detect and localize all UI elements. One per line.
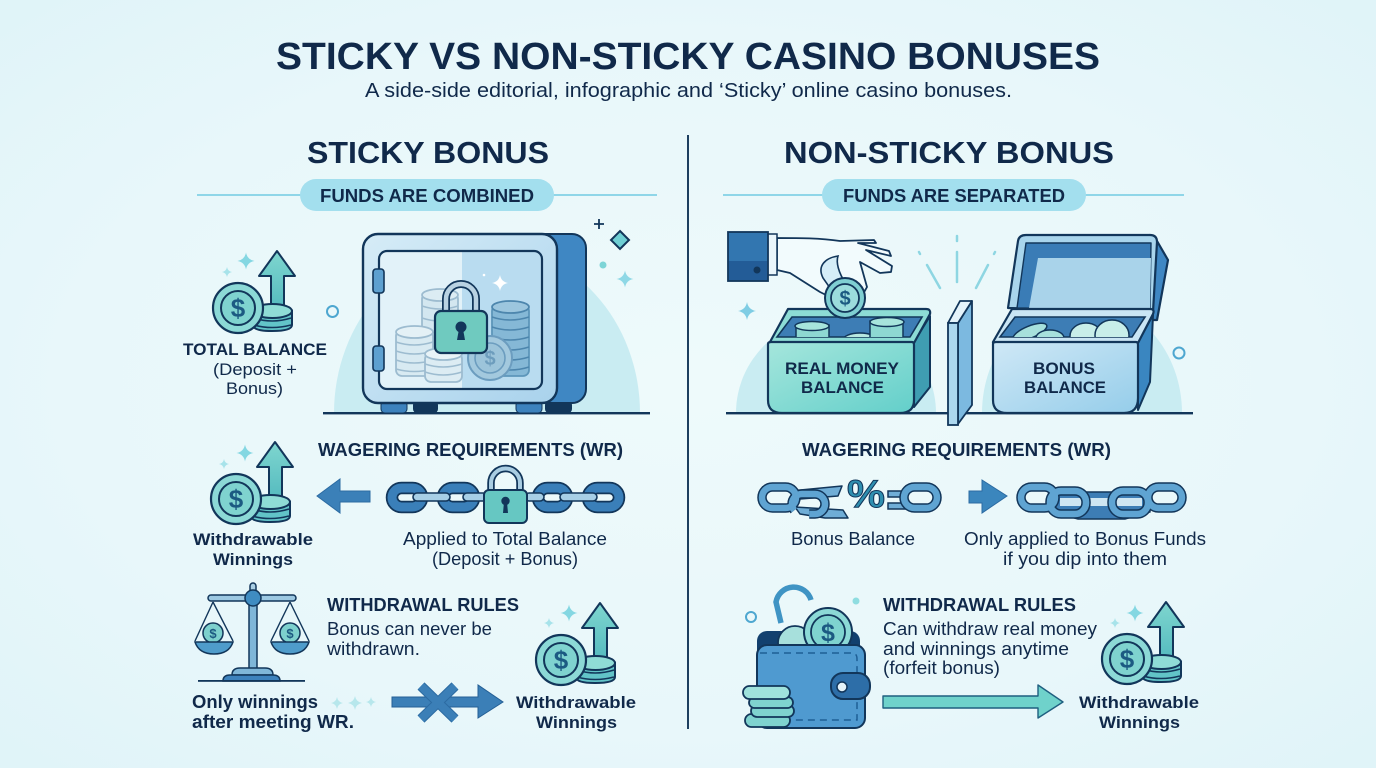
- panel: sticky bonus: [183, 135, 657, 732]
- wagering requirements: non-sticky: [762, 439, 1206, 569]
- title: STICKY VS NON-STICKY CASINO BONUSES: [276, 36, 1100, 78]
- withdrawal rules: non-sticky: [743, 587, 1199, 732]
- wagering requirements: sticky: [193, 439, 623, 569]
- total balance block: [183, 251, 327, 398]
- box: real money balance: BALANCE: [801, 378, 884, 397]
- hand dropping coin: $: [839, 288, 851, 310]
- hand dropping coin: [728, 232, 892, 318]
- withdrawal rules: sticky: Only winnings: [192, 692, 318, 712]
- total balance block: (Deposit +: [213, 360, 297, 379]
- padlock: [435, 284, 487, 353]
- box: real money balance: REAL MONEY: [785, 359, 900, 378]
- icon: coins and up arrow: [536, 603, 618, 685]
- withdrawal rules: sticky: withdrawn.: [326, 639, 420, 659]
- icon: coins and up arrow: [1102, 602, 1184, 684]
- total balance block: TOTAL BALANCE: [183, 340, 327, 359]
- icon: coins and up arrow: $: [231, 293, 246, 323]
- coins inside safe: $: [484, 348, 496, 370]
- wagering requirements: sticky: WAGERING REQUIREMENTS (WR): [318, 439, 623, 460]
- chain with padlock: [392, 468, 619, 523]
- broken chain with percent: [762, 473, 937, 518]
- icon: balance scale: $: [209, 626, 217, 641]
- withdrawal rules: non-sticky: WITHDRAWAL RULES: [883, 595, 1076, 615]
- withdrawal rules: sticky: Withdrawable: [516, 693, 636, 712]
- heading: sticky bonus: STICKY BONUS: [307, 135, 549, 170]
- box: real money balance: [768, 309, 930, 413]
- icon: coins and up arrow: $: [229, 484, 244, 514]
- box: bonus balance: BONUS: [1033, 359, 1095, 378]
- pill: funds are separated: FUNDS ARE SEPARATED: [843, 186, 1065, 206]
- subtitle: A side-side editorial, infographic and ‘Sticky’ online casino bonuses.: [365, 80, 1012, 102]
- icon: open wallet with coins: $: [821, 619, 835, 647]
- withdrawal rules: sticky: Winnings: [536, 713, 617, 732]
- icon: coins and up arrow: $: [1120, 644, 1135, 674]
- pill: funds are combined: [197, 179, 657, 211]
- icon: coins and up arrow: $: [554, 645, 569, 675]
- arrow: left: [317, 479, 370, 513]
- withdrawal rules: non-sticky: Can withdraw real money: [883, 619, 1097, 639]
- withdrawal rules: non-sticky: Winnings: [1099, 713, 1180, 732]
- illustration: separated balances: [726, 232, 1193, 425]
- icon: open wallet with coins: [743, 587, 870, 728]
- withdrawal rules: sticky: WITHDRAWAL RULES: [327, 595, 519, 615]
- wagering requirements: non-sticky: Bonus Balance: [791, 529, 915, 549]
- faint sparkles: [331, 696, 376, 710]
- divider panel: [948, 301, 972, 425]
- icon: balance scale: [195, 583, 309, 682]
- wagering requirements: sticky: Applied to Total Balance: [403, 529, 607, 549]
- intact chain: [1021, 487, 1182, 519]
- panel: non-sticky bonus: [723, 135, 1206, 732]
- sparkles: [492, 275, 508, 291]
- total balance block: Bonus): [226, 379, 283, 398]
- wagering requirements: non-sticky: WAGERING REQUIREMENTS (WR): [802, 439, 1111, 460]
- wagering requirements: non-sticky: if you dip into them: [1003, 549, 1167, 569]
- pill: funds are separated: [723, 179, 1184, 211]
- withdrawal rules: sticky: after meeting WR.: [192, 712, 354, 732]
- heading: non-sticky bonus: NON-STICKY BONUS: [784, 135, 1114, 170]
- coins inside safe: [396, 289, 529, 382]
- withdrawal rules: non-sticky: and winnings anytime: [883, 639, 1069, 659]
- illustration: locked safe: [323, 219, 650, 414]
- pill: funds are combined: FUNDS ARE COMBINED: [320, 186, 534, 206]
- coin stack: [743, 686, 794, 727]
- withdrawal rules: sticky: [192, 583, 636, 732]
- withdrawal rules: sticky: Bonus can never be: [327, 619, 492, 639]
- arrow: right: [969, 480, 1007, 513]
- icon: coins and up arrow: [213, 251, 295, 333]
- withdrawal rules: non-sticky: Withdrawable: [1079, 693, 1199, 712]
- wagering requirements: non-sticky: Only applied to Bonus Funds: [964, 529, 1206, 549]
- withdrawal rules: non-sticky: (forfeit bonus): [883, 658, 1000, 678]
- sparkle and ring: [738, 302, 756, 320]
- icon: balance scale: $: [286, 626, 294, 641]
- wagering requirements: sticky: Winnings: [213, 550, 293, 569]
- wagering requirements: sticky: (Deposit + Bonus): [432, 549, 578, 569]
- arrow: blocked: [392, 685, 503, 719]
- wagering requirements: sticky: Withdrawable: [193, 530, 313, 549]
- box: bonus balance: [993, 235, 1168, 413]
- center divider: [687, 135, 689, 729]
- icon: coins and up arrow: [211, 442, 293, 524]
- box: bonus balance: BALANCE: [1024, 378, 1106, 397]
- rays: [919, 236, 995, 288]
- broken chain with percent: %: [847, 473, 885, 516]
- arrow: right teal: [883, 685, 1063, 718]
